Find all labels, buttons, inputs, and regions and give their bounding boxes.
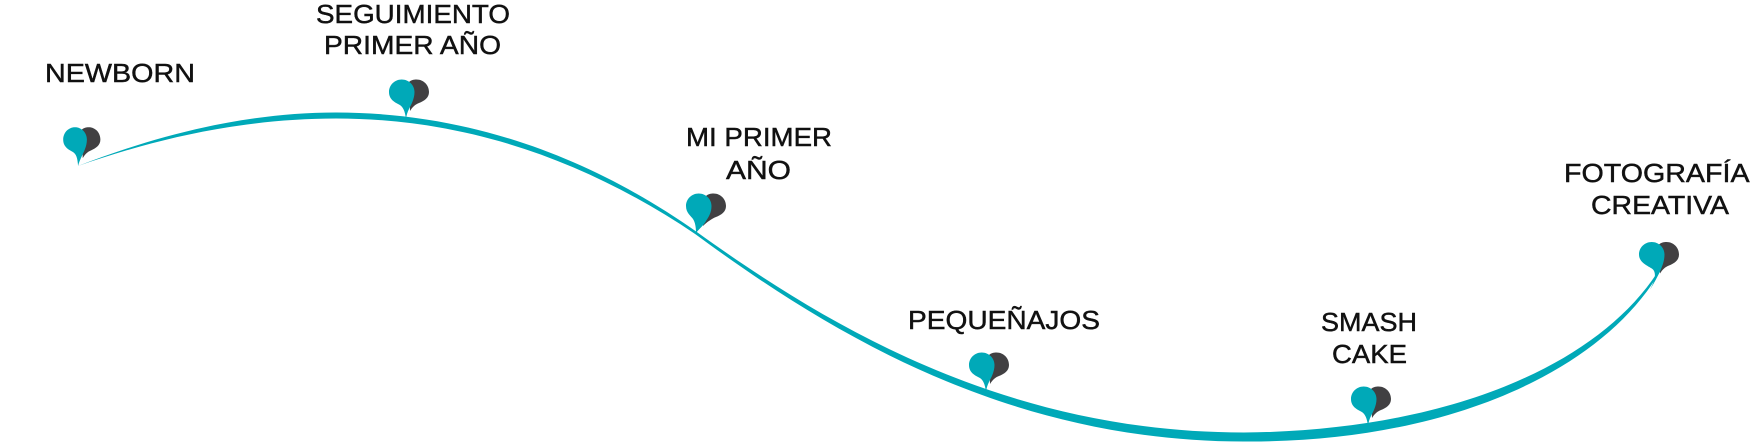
milestone: pequeñajos bbox=[908, 305, 1100, 392]
label: seguimiento primer año: PRIMER AÑO bbox=[324, 30, 501, 60]
icon: newborn pin bbox=[63, 127, 100, 166]
label: pequeñajos: PEQUEÑAJOS bbox=[908, 305, 1100, 335]
label: mi primer año: MI PRIMER bbox=[686, 122, 832, 152]
icon: pequeñajos pin bbox=[969, 352, 1009, 392]
label: newborn: NEWBORN bbox=[45, 58, 195, 88]
icon: seguimiento pin bbox=[389, 80, 429, 119]
tapered teal path curve bbox=[78, 112, 1661, 442]
label: fotografía creativa: FOTOGRAFÍA bbox=[1564, 158, 1750, 188]
icon: smash cake pin bbox=[1351, 386, 1391, 426]
milestone: smash cake bbox=[1321, 307, 1424, 426]
label: smash cake: CAKE bbox=[1332, 339, 1407, 369]
label: smash cake: SMASH bbox=[1321, 307, 1417, 337]
icon: fotografía creativa pin bbox=[1639, 242, 1679, 290]
icon: mi primer año pin bbox=[686, 194, 726, 233]
label: fotografía creativa: CREATIVA bbox=[1591, 190, 1730, 220]
milestone: seguimiento primer año bbox=[316, 0, 517, 119]
label: mi primer año: AÑO bbox=[726, 155, 791, 185]
milestone: fotografía creativa bbox=[1564, 158, 1755, 290]
milestone: newborn bbox=[45, 58, 195, 166]
milestone: mi primer año bbox=[686, 122, 839, 233]
